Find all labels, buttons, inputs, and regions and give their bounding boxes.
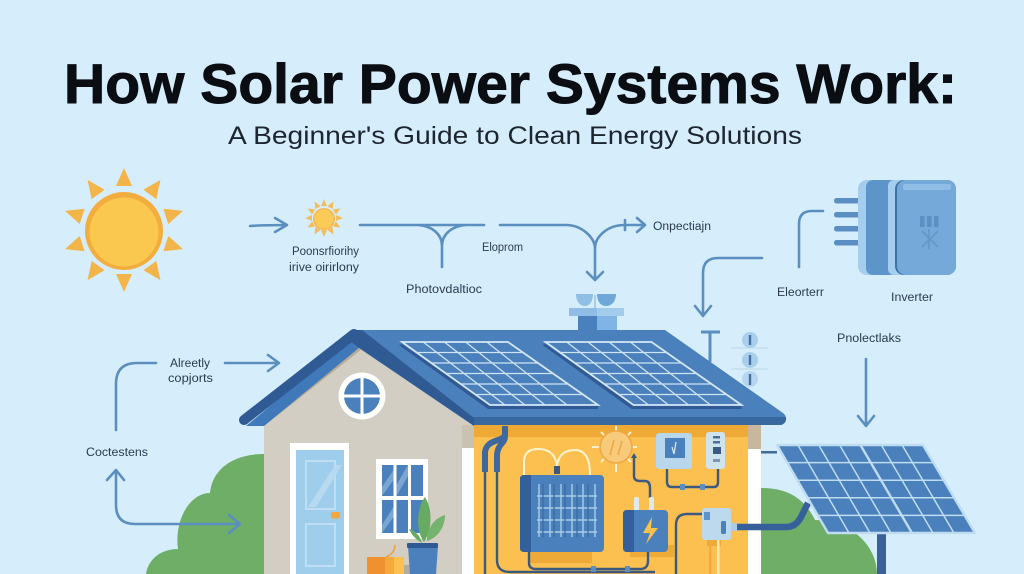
label: costs: Coctestens bbox=[86, 447, 148, 459]
meter bbox=[656, 433, 718, 490]
conduit collar bbox=[731, 523, 737, 531]
label: projections: Pnolectlaks bbox=[837, 333, 901, 345]
label: connection: Onpectiajn bbox=[653, 221, 711, 233]
label: electric: Eleorterr bbox=[777, 287, 824, 299]
ground panel post bbox=[877, 534, 886, 574]
icon: inverter bbox=[834, 180, 956, 275]
yellow utility wall bbox=[462, 425, 777, 574]
charge controller with lightning bbox=[623, 497, 674, 557]
arrow: inverter to roof bbox=[695, 258, 762, 316]
label: sun caption: Poonsrfiorihy bbox=[292, 246, 359, 258]
roof solar panel 2 bbox=[542, 342, 742, 409]
label: electron: Eloprom bbox=[482, 242, 523, 254]
icon: sensor stack bbox=[731, 332, 768, 387]
round attic window bbox=[338, 372, 386, 420]
wire under battery bbox=[529, 552, 648, 572]
label: sun caption bbox=[289, 246, 359, 274]
antenna bbox=[701, 332, 720, 362]
arrow: sun to small sun bbox=[250, 218, 287, 232]
potted plant bbox=[407, 497, 445, 574]
sun dial gauge bbox=[592, 426, 637, 472]
label: photovoltaic: Photovdaltioc bbox=[406, 284, 482, 296]
arrow: loop around costs bbox=[107, 470, 240, 533]
label: inverter: Inverter bbox=[891, 292, 933, 304]
door bbox=[290, 443, 349, 574]
downpipe and conduits bbox=[485, 426, 655, 574]
icon: large sun bbox=[63, 168, 185, 292]
battery box bbox=[520, 449, 604, 563]
parcel box bbox=[367, 545, 411, 574]
roof solar panel 1 bbox=[399, 342, 598, 409]
bush: right bbox=[761, 488, 877, 574]
arrow: elbow from costs bbox=[116, 363, 156, 430]
label: already bbox=[168, 358, 213, 385]
arrow: to house bbox=[225, 355, 279, 371]
wire to junction box bbox=[676, 514, 703, 574]
arrow: elbow at inverter bbox=[799, 211, 823, 267]
conduit to ground panel bbox=[731, 503, 808, 527]
front window bbox=[376, 459, 428, 539]
chimney bbox=[569, 294, 624, 332]
arrow: branch down to chimney and out to connection bbox=[500, 218, 645, 280]
house wall bbox=[264, 349, 474, 574]
arrow: down to ground panel bbox=[858, 359, 874, 426]
icon: small sun bbox=[305, 199, 343, 237]
subtitle: A Beginner's Guide to Clean Energy Solutions bbox=[228, 122, 802, 150]
ground solar panel bbox=[777, 445, 975, 533]
arrow tip on wire bbox=[631, 453, 637, 458]
roof bbox=[244, 330, 786, 426]
label: sun caption: irive oirirlony bbox=[289, 262, 359, 274]
bush: left bbox=[146, 454, 264, 574]
arrow: branch to photovoltaic bbox=[360, 225, 484, 267]
label: already: Alreetly bbox=[170, 358, 210, 370]
control box bbox=[706, 432, 725, 469]
wire from dial to charge box bbox=[634, 458, 650, 498]
label: already: copjorts bbox=[168, 373, 213, 385]
title: How Solar Power Systems Work: bbox=[64, 52, 957, 115]
junction box bbox=[702, 508, 731, 574]
